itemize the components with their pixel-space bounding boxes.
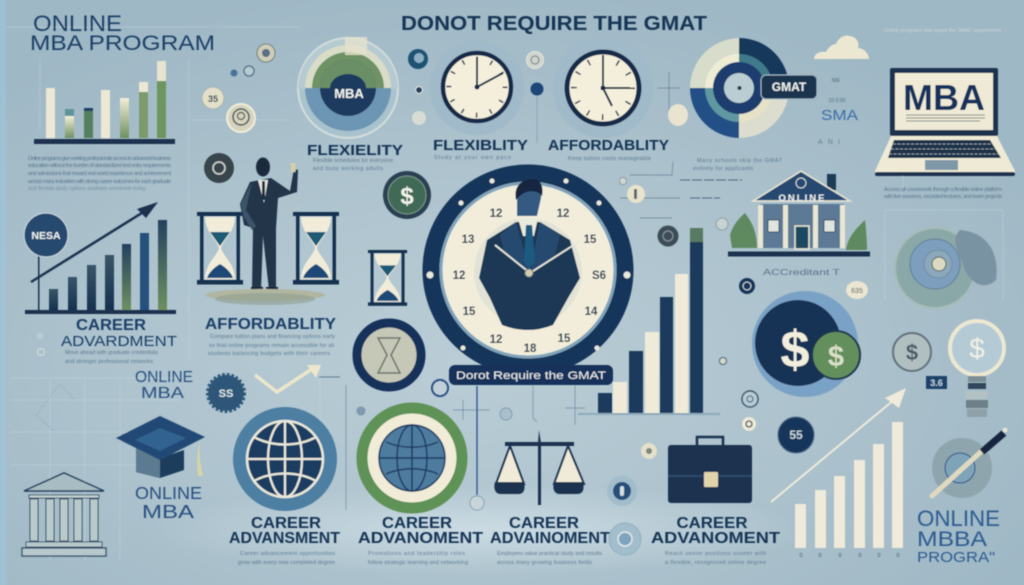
text block: career note: Move ahead with graduate credentials [65, 350, 158, 356]
hourglass left [197, 212, 243, 284]
bar chart: bottom right: 0 [839, 553, 842, 559]
swirl seal [895, 228, 997, 308]
globe 2 [362, 408, 462, 508]
dollar medallion [752, 291, 860, 397]
text block: flexibility note [313, 158, 393, 172]
text block: gmat note [693, 158, 783, 172]
career note 1: Career advancement opportunities [240, 551, 335, 557]
career note 4: Reach senior positions sooner with [665, 551, 766, 557]
clock numbers: 12 [557, 208, 569, 220]
career heading 3 [490, 515, 611, 547]
text block: affordability note [208, 334, 335, 357]
icon: temple [22, 473, 106, 556]
icon: school building [728, 171, 870, 254]
clock hands [495, 241, 580, 273]
text block: flexibility note: and busy working adults [313, 166, 383, 172]
decorative short lines [680, 180, 742, 198]
heading: affordability 2: AFFORDABLITY [205, 316, 337, 333]
coin 55: 55 [789, 428, 803, 442]
text block: flexibility note: Flexible schedules for everyone [313, 158, 393, 164]
heading: career advardment: ADVARDMENT [61, 333, 177, 350]
coin 55 [778, 417, 814, 453]
icon: scales [494, 430, 584, 505]
clock 2 [553, 38, 653, 138]
connector lines [346, 380, 585, 510]
bar chart: bottom right: 0 [897, 553, 900, 559]
online mba label [135, 369, 193, 402]
text block: chart description: and admissions that reward real world experience and achievement [28, 171, 171, 177]
text block: chart description: education without the burden of standardized test entry requirements [28, 163, 171, 169]
text block: affordability note: so that online programs remain accessible for all [209, 343, 334, 349]
clock numbers: 12 [490, 208, 502, 220]
badge: NESA [24, 213, 68, 310]
bar chart: top left [34, 61, 175, 144]
bar chart: bottom right [795, 422, 903, 559]
bar chart: bottom right: 0 [859, 553, 862, 559]
career note 1 [238, 551, 335, 566]
text block: affordability note: Compare tuition plans and financing options early [210, 334, 335, 340]
text block: career note [65, 350, 158, 365]
GMAT tag [761, 75, 817, 99]
icon: pen with circle [932, 428, 1008, 498]
title: online mba program: ONLINE [33, 11, 122, 36]
label: online mbba program: PROGRA" [917, 549, 995, 566]
text block: laptop note [883, 187, 1002, 200]
bar chart: center right [578, 228, 720, 415]
label: online mbba program [917, 506, 1000, 566]
text block: gmat note: Many schools skip the GMAT [697, 158, 783, 164]
dollar medallion: $ [828, 341, 844, 373]
text notes under headings [434, 155, 651, 162]
text notes under headings: Study at your own pace [434, 155, 511, 161]
heading: career advardment [61, 317, 177, 350]
career heading 4 [651, 515, 781, 547]
icon: school building: ONLINE [778, 193, 824, 204]
clock numbers: 15 [463, 306, 476, 318]
magnifier with dollar [950, 321, 1004, 417]
dollar coin: $ [400, 183, 414, 210]
small coin icons: 35 [208, 94, 218, 104]
text block: laptop note: Access all coursework through a flexible online platform [884, 187, 1002, 193]
chip: 3.6 [930, 378, 943, 388]
arrow: cream check [255, 365, 340, 392]
label: SMA: NIE [832, 78, 841, 84]
small badges [716, 218, 868, 431]
clock 1 [430, 41, 524, 135]
text block: chart description: Online programs give working professionals access to advanced business [28, 156, 171, 162]
arrow: bottom right [771, 388, 906, 502]
pie chart: MBA [298, 37, 398, 138]
icon: laptop: MBA [903, 77, 985, 118]
clock numbers: 13 [462, 234, 474, 246]
seal dollar: $ [906, 340, 918, 365]
career note 1: grow with every new completed degree [238, 560, 335, 566]
label: SMA: ANI [818, 139, 840, 146]
faint text top right: Online programs that waive the GMAT requirement [884, 28, 1002, 34]
title: do not require the GMAT: DONOT REQUIRE THE GMAT [401, 13, 707, 35]
clock numbers: 14 [585, 306, 598, 318]
career heading 1: CAREER [251, 515, 321, 532]
label: SMA [818, 78, 858, 146]
clock numbers: 18 [524, 343, 537, 355]
big clock with figure [426, 173, 630, 367]
career heading 2 [358, 515, 484, 547]
heading glow band [150, 485, 810, 575]
label: SMA: 10 0 00 [829, 98, 846, 104]
pie chart: GMAT [690, 38, 789, 138]
bar chart: bottom right: 0 [878, 553, 881, 559]
clock numbers: 12 [453, 270, 465, 282]
text block: chart description: across many industries with strong career outcomes for each graduate [28, 179, 171, 185]
online mba label lower [135, 483, 202, 522]
icon: laptop [875, 68, 1015, 176]
clock bezel dots [426, 178, 630, 350]
clock numbers: 15 [584, 234, 597, 246]
globe 1 [233, 407, 337, 511]
small coin icons [202, 44, 275, 183]
clock numbers: S6 [592, 270, 606, 282]
small badges: 635 [851, 288, 863, 295]
career heading 4: ADVANOMENT [651, 530, 781, 547]
text block: affordability note: students balancing budgets with their careers [208, 351, 330, 357]
career note 4 [665, 551, 766, 566]
online mba label: ONLINE [135, 369, 193, 386]
career note 3 [497, 551, 602, 566]
icon: briefcase [668, 437, 752, 503]
connector dots [526, 52, 544, 143]
bar chart: career growth [25, 220, 176, 314]
seal icon [208, 375, 244, 411]
pill label [449, 365, 613, 385]
career heading 3: CAREER [509, 515, 579, 532]
career heading 3: ADVAINOMENT [490, 530, 611, 547]
online mba label lower: MBA [142, 502, 194, 522]
career heading 4: CAREER [676, 515, 748, 532]
icon: sketch [36, 384, 74, 431]
career heading 1: ADVANSMENT [229, 530, 341, 547]
title: online mba program: MBA PROGRAM [30, 32, 215, 55]
clock numbers [453, 208, 606, 355]
dollar coin [383, 171, 431, 219]
career note 2: follow strategic learning and networking [368, 560, 468, 566]
clock numbers: 15 [558, 333, 571, 345]
clock numbers: 12 [490, 334, 502, 346]
figure: businessman [240, 158, 298, 290]
seal icon: SS [219, 388, 233, 400]
dollar medallion: $ [781, 321, 810, 379]
bar chart: bottom right: 0 [819, 553, 822, 559]
text block: laptop note: with live sessions, recorded lectures, and team projects [883, 194, 1002, 200]
heading: flexibility 1: FLEXIELITY [307, 143, 403, 159]
platform [205, 289, 325, 305]
hourglass small [368, 250, 407, 306]
pie chart: MBA: MBA [334, 86, 364, 101]
icon: graduation cap [116, 416, 205, 478]
career heading 2: CAREER [382, 515, 452, 532]
badge: NESA: NESA [31, 230, 61, 242]
text notes under headings: Keep tuition costs manageable [568, 156, 651, 162]
suited figure [479, 179, 580, 330]
label: online mbba program: MBBA [917, 528, 987, 551]
career note 3: Employers value practical study and results [497, 551, 602, 557]
text block: gmat note: entirely for applicants [693, 166, 753, 172]
label: online mbba program: ONLINE [917, 506, 1000, 531]
decorative markers [620, 72, 680, 218]
coin markers [627, 104, 688, 246]
dark coin hourglass [357, 323, 421, 387]
hourglass right [293, 212, 339, 284]
label: SMA: SMA [821, 108, 858, 124]
career note 3: across many growing business fields [497, 560, 592, 566]
heading: flexibility 2: FLEXIBLITY [433, 138, 528, 154]
title: online mba program [30, 11, 215, 55]
label: accreditation: ACCreditant T [763, 268, 840, 277]
heading: career advardment: CAREER [76, 317, 146, 334]
icon: cloud [814, 35, 869, 59]
GMAT tag: GMAT [772, 80, 807, 94]
icon: small dots [38, 334, 44, 356]
chip [926, 376, 947, 389]
icon: small node [408, 49, 428, 125]
career note 2 [368, 551, 468, 566]
arrow: growth [31, 202, 158, 282]
pill label: Dorot Require the GMAT [456, 370, 606, 382]
career heading 2: ADVANOMENT [358, 530, 484, 547]
heading: affordability 1: AFFORDABLITY [548, 137, 669, 154]
text block: chart description [28, 156, 171, 192]
seal dollar [893, 333, 931, 371]
text block: chart description: and flexible study options available worldwide today [28, 186, 146, 192]
bar chart: bottom right: 0 [800, 553, 803, 559]
magnifier with dollar: $ [969, 333, 985, 364]
career heading 1 [229, 515, 341, 547]
online mba label lower: ONLINE [135, 483, 202, 503]
career note 4: a flexible, recognized online degree [665, 560, 766, 566]
round icons [607, 443, 657, 555]
career note 2: Promotions and leadership roles [368, 551, 465, 557]
text block: career note: and stronger professional networks [65, 359, 153, 365]
online mba label: MBA [141, 385, 185, 402]
